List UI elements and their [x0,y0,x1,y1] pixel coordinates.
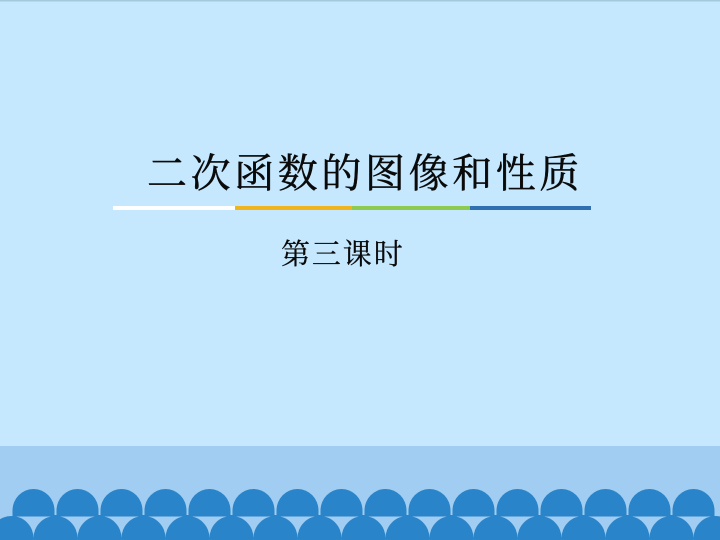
title: 二次函数的图像和性质 [147,151,583,196]
top edge strip [0,0,720,2]
subtitle: 第三课时 [281,238,405,271]
bottom wave band [0,446,720,540]
tricolour divider [113,206,591,210]
